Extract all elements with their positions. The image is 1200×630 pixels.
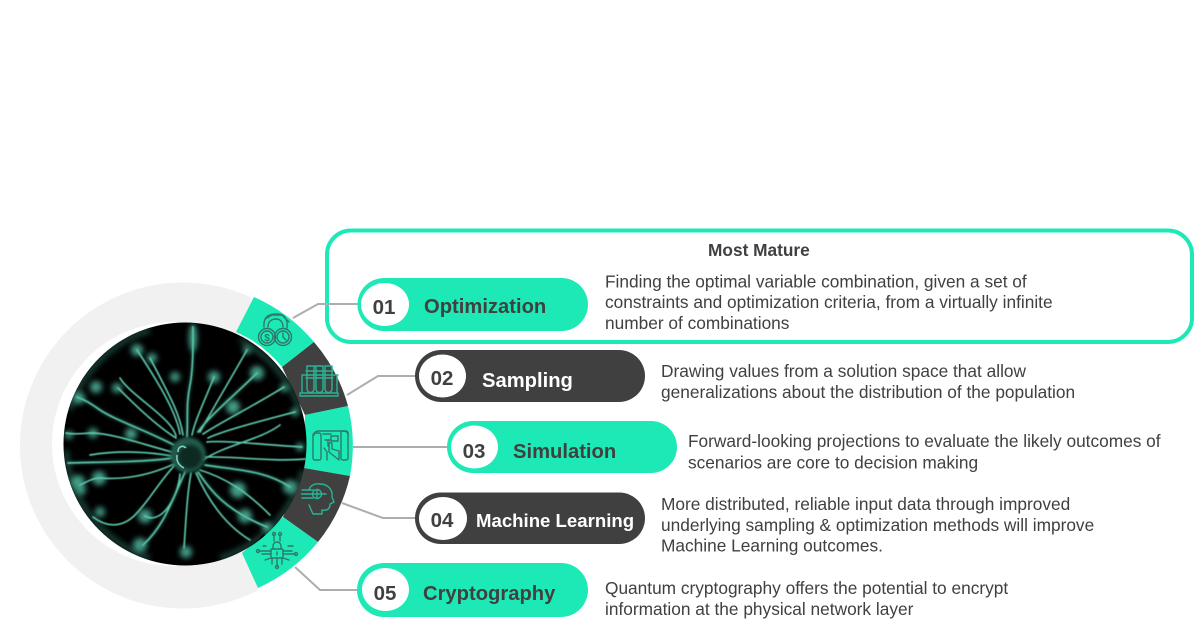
most mature highlight box <box>327 230 1192 342</box>
pill 04 machine learning: 04 <box>431 509 454 532</box>
description 03: Forward-looking projections to evaluate the likely outcomes of <box>688 431 1161 451</box>
description 01 <box>605 272 1053 333</box>
segment 3 <box>304 406 353 476</box>
icon: cryptography padlock circuit <box>256 532 298 568</box>
plasma sphere <box>63 322 307 574</box>
pill 04 machine learning <box>415 492 645 544</box>
most mature heading: Most Mature <box>708 240 810 260</box>
description 02 <box>661 361 1075 402</box>
description 05 <box>605 578 1008 619</box>
pill 02 sampling: 02 <box>431 367 453 390</box>
pill 01 optimization: Optimization <box>424 296 546 318</box>
pill 05 cryptography <box>357 563 588 617</box>
connector 3 <box>353 446 447 448</box>
segment 2 <box>282 342 348 415</box>
icon: machine learning head <box>302 484 334 514</box>
pill 05 cryptography: 05 <box>374 582 396 605</box>
grey outer ring <box>20 282 262 608</box>
pill 03 simulation: 03 <box>463 440 485 463</box>
description 05: Quantum cryptography offers the potential to encrypt <box>605 578 1008 598</box>
white crescent <box>52 322 296 566</box>
connector 2 <box>347 376 415 395</box>
pill 04 machine learning: Machine Learning <box>476 510 634 531</box>
description 01: number of combinations <box>605 313 790 333</box>
pill 01 optimization: 01 <box>373 296 395 319</box>
description 01: constraints and optimization criteria, from a virtually infinite <box>605 292 1053 312</box>
pill 03 simulation <box>447 421 677 473</box>
segment 5 <box>242 517 318 588</box>
icon: optimization dollar clocks <box>258 314 292 346</box>
pill 02 sampling: Sampling <box>482 370 573 392</box>
icon: test tubes <box>300 366 338 396</box>
description 01: Finding the optimal variable combination, given a set of <box>605 272 1027 292</box>
description 02: Drawing values from a solution space that allow <box>661 361 1027 381</box>
pill 05 cryptography: Cryptography <box>423 583 556 605</box>
description 04 <box>661 494 1094 556</box>
connector 5 <box>295 567 357 590</box>
description 05: information at the physical network layer <box>605 599 914 619</box>
connector 1 <box>293 304 358 318</box>
icon: simulation hand <box>313 431 348 460</box>
description 03: scenarios are core to decision making <box>688 452 978 472</box>
dollar sign: $ <box>264 333 270 344</box>
segment 4 <box>283 468 350 542</box>
pill 01 optimization <box>358 278 588 331</box>
description 04: More distributed, reliable input data through improved <box>661 494 1070 514</box>
circular diagram <box>20 282 353 608</box>
description 04: underlying sampling & optimization methods will improve <box>661 515 1094 535</box>
pill 02 sampling <box>415 350 645 402</box>
segment 1 <box>236 297 314 367</box>
pill 03 simulation: Simulation <box>513 441 616 463</box>
description 02: generalizations about the distribution of the population <box>661 382 1075 402</box>
description 03 <box>688 431 1161 472</box>
description 04: Machine Learning outcomes. <box>661 536 883 556</box>
connector 4 <box>342 503 415 518</box>
